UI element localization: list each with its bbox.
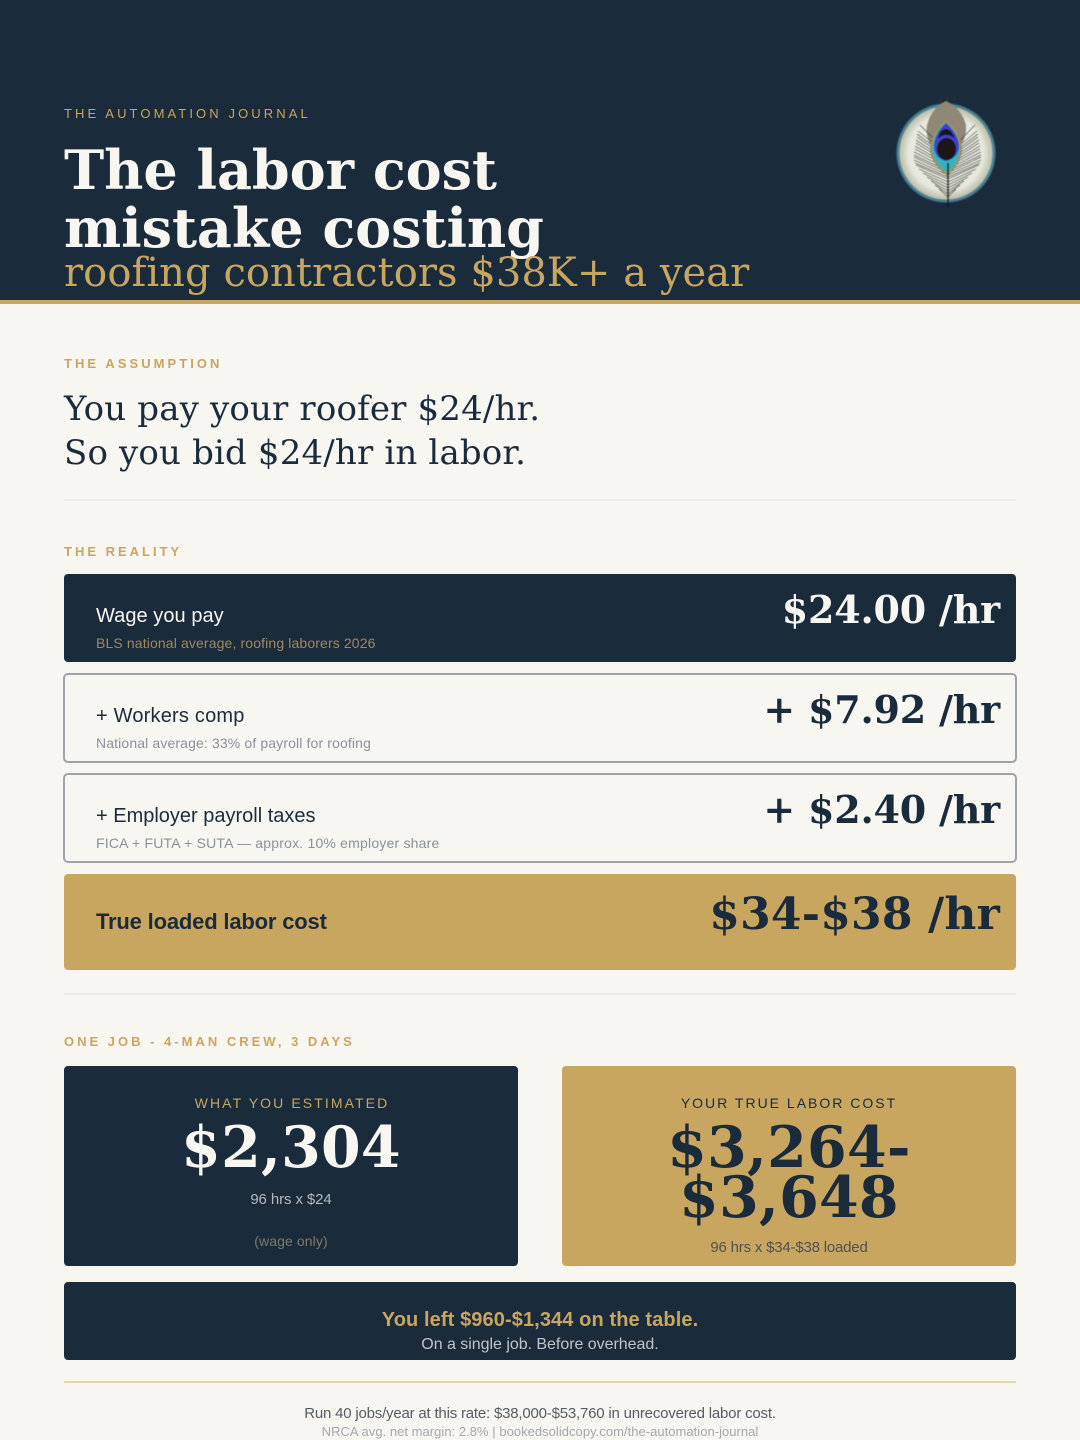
card label: WHAT YOU ESTIMATED bbox=[195, 1095, 389, 1111]
header band bbox=[0, 0, 1080, 304]
row source: BLS national average, roofing laborers 2026 bbox=[96, 635, 376, 651]
row source: National average: 33% of payroll for roofing bbox=[96, 735, 371, 751]
callout headline: You left $960-$1,344 on the table. bbox=[382, 1309, 698, 1331]
section label: one job: ONE JOB - 4-MAN CREW, 3 DAYS bbox=[64, 1034, 355, 1049]
row value: + $7.92 /hr bbox=[763, 687, 1000, 732]
card: estimated bbox=[64, 1066, 518, 1266]
row label: Wage you pay bbox=[96, 605, 224, 627]
section label: the assumption: THE ASSUMPTION bbox=[64, 356, 223, 371]
row value: $34-$38 /hr bbox=[709, 889, 1000, 940]
row value: + $2.40 /hr bbox=[763, 787, 1000, 832]
row: payroll taxes bbox=[63, 773, 1017, 863]
row label: True loaded labor cost bbox=[96, 909, 327, 934]
footer source: NRCA avg. net margin: 2.8% | bookedsolidcopy.com/the-automation-journal bbox=[322, 1424, 758, 1439]
card note: 96 hrs x $24 bbox=[250, 1191, 332, 1208]
callout subline: On a single job. Before overhead. bbox=[421, 1336, 659, 1353]
row label: + Workers comp bbox=[96, 705, 245, 727]
row: wage bbox=[64, 574, 1016, 662]
title: The labor cost bbox=[64, 138, 497, 202]
publication name: THE AUTOMATION JOURNAL bbox=[64, 106, 311, 121]
subtitle: roofing contractors $38K+ a year bbox=[64, 250, 749, 296]
card amount bbox=[667, 1114, 911, 1231]
row: workers comp bbox=[63, 673, 1017, 763]
title: mistake costing bbox=[64, 196, 544, 260]
card label: YOUR TRUE LABOR COST bbox=[681, 1095, 897, 1111]
row value: $24.00 /hr bbox=[782, 587, 1000, 632]
row label: + Employer payroll taxes bbox=[96, 805, 316, 827]
assumption statement: You pay your roofer $24/hr. bbox=[64, 389, 540, 429]
card amount: $3,264- bbox=[667, 1114, 911, 1181]
card amount: $3,648 bbox=[679, 1164, 899, 1231]
title bbox=[64, 138, 544, 260]
callout: left on the table bbox=[64, 1282, 1016, 1360]
assumption statement: So you bid $24/hr in labor. bbox=[64, 433, 526, 473]
icon: peacock feather medallion bbox=[896, 96, 996, 208]
card: true cost bbox=[562, 1066, 1016, 1266]
section label: the reality: THE REALITY bbox=[64, 544, 182, 559]
row: true loaded cost bbox=[64, 874, 1016, 970]
card amount: $2,304 bbox=[181, 1114, 401, 1181]
footer summary: Run 40 jobs/year at this rate: $38,000-$53,760 in unrecovered labor cost. bbox=[304, 1405, 776, 1422]
row source: FICA + FUTA + SUTA — approx. 10% employer share bbox=[96, 835, 439, 851]
card note: (wage only) bbox=[254, 1233, 328, 1249]
card note: 96 hrs x $34-$38 loaded bbox=[710, 1239, 868, 1256]
assumption statement bbox=[64, 389, 540, 473]
